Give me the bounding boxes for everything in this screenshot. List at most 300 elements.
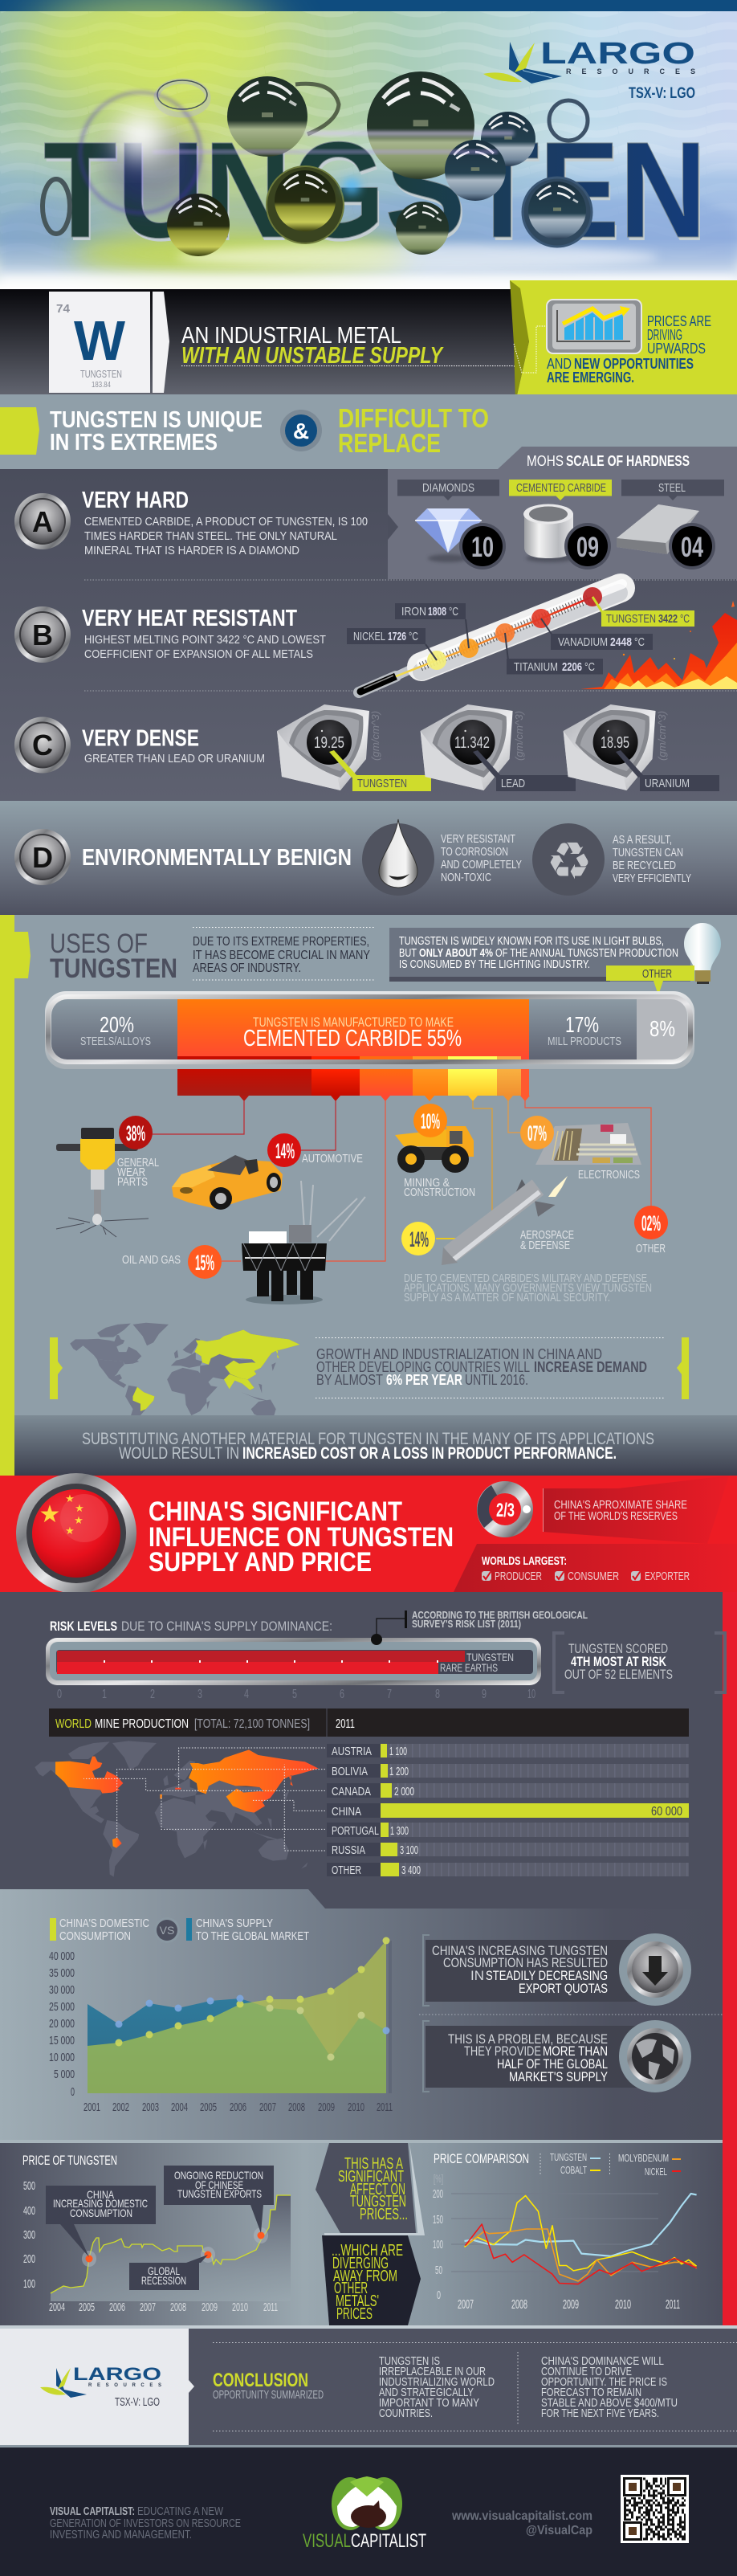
value: 14 percent — [267, 1133, 301, 1167]
icon: recycle — [532, 823, 605, 896]
line chart: price comparison: 150 — [433, 2213, 443, 2227]
text: corrosion resistance: NON-TOXIC — [441, 871, 491, 884]
title: China's influence — [149, 1496, 454, 1578]
line chart: price of tungsten: 2010 — [232, 2300, 248, 2314]
QR code — [621, 2475, 689, 2543]
text: corrosion resistance: TO CORROSION — [441, 845, 508, 859]
callout: export quotas: EXPORT QUOTAS — [519, 1981, 608, 1996]
text: demand growth: OTHER DEVELOPING COUNTRIES WILL — [316, 1359, 530, 1375]
risk level meter: 7 — [387, 1688, 392, 1701]
heading: uses of tungsten — [50, 929, 177, 984]
use: aerospace and defense — [401, 1176, 574, 1265]
line chart: price of tungsten: 2006 — [109, 2300, 125, 2314]
mohs score 04: 04 — [681, 532, 703, 563]
arrow: significant affect: AFFECT ON — [350, 2181, 405, 2198]
panel: Mohs scale of hardness: MOHS — [527, 453, 564, 469]
legend: TO THE GLOBAL MARKET — [196, 1929, 309, 1943]
density block: uranium: URANIUM — [645, 777, 690, 790]
line chart: price comparison: 200 — [433, 2187, 443, 2201]
text: uses intro: IT HAS BECOME CRUCIAL IN MANY — [193, 949, 370, 962]
arrow: diverging metals: PRICES — [336, 2305, 373, 2323]
callout: global supply — [423, 2020, 691, 2092]
segment: steels and alloys: STEELS/ALLOYS — [80, 1035, 151, 1048]
arrow: significant affect — [316, 2143, 425, 2325]
text: uses intro — [193, 935, 370, 975]
callout: reduced exports: TUNGSTEN EXPORTS — [177, 2187, 262, 2200]
segment: steels and alloys — [80, 1012, 151, 1048]
label: nickel: 1726 — [388, 630, 406, 643]
property B: very heat resistant: HIGHEST MELTING POINT 3422 °C AND LOWEST — [84, 633, 326, 647]
property A: very hard: A — [32, 505, 53, 538]
use: mining and construction: MINING & — [404, 1176, 450, 1190]
callout: export quotas: CHINA'S INCREASING TUNGSTEN — [432, 1943, 608, 1958]
text: demand growth: BY ALMOST — [316, 1372, 383, 1388]
area chart: consumption and supply — [49, 1937, 393, 2114]
icon: dump truck — [395, 1126, 474, 1173]
row: Portugal: PORTUGAL — [332, 1824, 379, 1838]
line chart: price comparison — [433, 2151, 697, 2312]
label: titanium: TITANIUM — [514, 660, 558, 674]
checklist: worlds largest: CONSUMER — [568, 1570, 619, 1583]
text: uses intro: DUE TO ITS EXTREME PROPERTIES, — [193, 935, 369, 949]
world mine production header: [TOTAL: 72,100 TONNES] — [194, 1717, 310, 1731]
text: national security: DUE TO CEMENTED CARBIDE'S MILITARY AND DEFENSE — [404, 1272, 647, 1285]
area chart: consumption and supply: 25 000 — [49, 2000, 75, 2014]
mohs score 10: 10 — [471, 532, 494, 563]
use: other: 02% — [641, 1211, 661, 1235]
panel: consumption vs supply — [0, 1889, 723, 2140]
row: Other: 3 400 — [401, 1864, 421, 1877]
legend: MOLYBDENUM — [618, 2152, 669, 2164]
legend: TUNGSTEN — [550, 2151, 587, 2163]
price callout panel — [510, 280, 737, 402]
heading: uses of tungsten: TUNGSTEN — [50, 953, 177, 984]
element card — [49, 292, 169, 393]
segment: cemented carbide: TUNGSTEN IS MANUFACTURED TO MAKE — [253, 1014, 454, 1030]
intro heading: AN INDUSTRIAL METAL — [181, 323, 401, 349]
area chart: consumption and supply: 15 000 — [49, 2034, 75, 2047]
mohs score 09: 09 — [576, 532, 599, 563]
row: Austria: 1 100 — [389, 1745, 407, 1758]
panel: Mohs scale of hardness — [388, 447, 737, 579]
text: demand growth: INCREASE DEMAND — [534, 1359, 647, 1375]
area chart: consumption and supply: 2002 — [112, 2100, 129, 2114]
density block: tungsten: (gm/cm^3) — [369, 711, 381, 761]
risk level meter: DUE TO CHINA'S SUPPLY DOMINANCE: — [121, 1619, 332, 1634]
area chart: consumption and supply: 10 000 — [49, 2051, 75, 2064]
heading: unique: TUNGSTEN IS UNIQUE — [50, 407, 263, 433]
carbide breakdown strip — [177, 1069, 530, 1101]
use: automotive — [172, 1133, 363, 1210]
legend: VS — [160, 1924, 174, 1937]
Visual Capitalist logo — [303, 2476, 426, 2552]
property A: very hard — [14, 488, 368, 557]
stacked bar: use share — [45, 991, 694, 1069]
price callout panel: UPWARDS — [647, 341, 706, 357]
label: titanium: 2206 — [562, 660, 582, 674]
row: Austria — [327, 1744, 689, 1758]
use: electronics: ELECTRONICS — [578, 1168, 640, 1182]
conclusion section — [0, 2329, 737, 2445]
callout: export quotas: CONSUMPTION HAS RESULTED — [443, 1955, 608, 1970]
risk level meter: RARE EARTHS — [440, 1661, 498, 1674]
Largo logo top right — [483, 37, 695, 102]
Largo logo small: TSX-V: LGO — [115, 2395, 160, 2409]
callout: light bulbs: OF THE ANNUAL TUNGSTEN PRODUCTION — [495, 946, 678, 960]
text: corrosion resistance: VERY RESISTANT — [441, 832, 515, 846]
text: recycled: BE RECYCLED — [613, 859, 676, 872]
heading band: unique and difficult to replace — [0, 394, 737, 469]
line chart: price comparison: PRICE COMPARISON — [434, 2151, 529, 2166]
callout: reduced exports: OF CHINESE — [195, 2178, 243, 2191]
arrow: diverging metals — [322, 2235, 421, 2325]
area chart: consumption and supply: 40 000 — [49, 1949, 75, 1963]
intro heading: WITH AN UNSTABLE SUPPLY — [181, 343, 444, 369]
Visual Capitalist logo: CAPITALIST — [351, 2530, 426, 2552]
legend: NICKEL — [645, 2166, 667, 2178]
icon: China flag button — [16, 1473, 136, 1594]
property D: environmentally benign: ENVIRONMENTALLY BENIGN — [82, 845, 352, 871]
density block: uranium: (gm/cm^3) — [656, 711, 668, 761]
density block: tungsten: 19.25 — [314, 734, 344, 752]
row: Bolivia — [327, 1764, 689, 1778]
callout: recession — [129, 2255, 208, 2290]
panel: China heading — [0, 1473, 737, 1594]
icon: cemented carbide cylinder — [523, 504, 574, 562]
text: Visual Capitalist about: GENERATION OF INVESTORS ON RESOURCE — [50, 2517, 241, 2530]
area chart: consumption and supply: 2001 — [83, 2100, 100, 2114]
text: conclusion column two: FOR THE NEXT FIVE YEARS. — [541, 2407, 659, 2420]
risk level meter: 10 — [527, 1688, 535, 1701]
properties section — [0, 447, 737, 801]
Largo logo small — [40, 2364, 161, 2409]
area chart: consumption and supply: 2011 — [377, 2100, 393, 2114]
text: national security: APPLICATIONS, MANY GOVERNMENTS VIEW TUNGSTEN — [404, 1281, 652, 1295]
callout: domestic consumption: CHINA — [87, 2188, 115, 2201]
label: iron: °C — [449, 605, 458, 618]
text: recycled: AS A RESULT, — [613, 833, 672, 847]
line chart: price of tungsten: 500 — [23, 2179, 35, 2193]
callout: 4th most at risk: 4TH MOST AT RISK — [571, 1654, 667, 1669]
area chart: consumption and supply: 2009 — [318, 2100, 335, 2114]
area chart: consumption and supply: 2004 — [171, 2100, 188, 2114]
callout: export quotas — [423, 1933, 691, 2006]
title: China's influence: INFLUENCE ON TUNGSTEN — [149, 1522, 454, 1553]
text: recycled: TUNGSTEN CAN — [613, 846, 683, 859]
segment: mill products: 17% — [565, 1012, 599, 1037]
icon: China flag button: ★ — [39, 1500, 60, 1529]
value: 07 percent: 07% — [527, 1121, 547, 1145]
segment: mill products: MILL PRODUCTS — [548, 1035, 621, 1048]
callout: light bulbs: ONLY ABOUT 4% — [419, 946, 493, 960]
row: Other: OTHER — [332, 1864, 361, 1877]
property B: very heat resistant — [14, 606, 326, 663]
world mine production header — [49, 1708, 689, 1737]
property B: very heat resistant: VERY HEAT RESISTANT — [82, 606, 297, 631]
heading: conclusion: CONCLUSION — [213, 2370, 308, 2391]
legend: CONSUMPTION — [59, 1929, 131, 1943]
icon: rising price chart — [547, 300, 641, 353]
row: China: CHINA — [332, 1805, 361, 1819]
label: titanium: °C — [584, 660, 595, 674]
use: general wear parts: WEAR — [117, 1166, 145, 1179]
icon: thermometer — [347, 584, 694, 692]
callout: reduced exports: ONGOING REDUCTION — [174, 2169, 263, 2182]
callout: light bulbs — [389, 928, 690, 982]
value: 10 percent: 10% — [421, 1109, 440, 1133]
text: demand growth — [316, 1346, 647, 1388]
segment: cemented carbide — [243, 1014, 462, 1051]
tag: diamonds: DIAMONDS — [422, 481, 474, 495]
risk level meter: 1 — [102, 1688, 107, 1701]
mohs score 04 — [669, 523, 715, 569]
property A: very hard: MINERAL THAT IS HARDER IS A DIAMOND — [84, 544, 299, 557]
risk level meter: 8 — [435, 1688, 440, 1701]
density block: lead — [421, 704, 576, 791]
title: China's influence: SUPPLY AND PRICE — [149, 1547, 372, 1578]
row: Austria: AUSTRIA — [332, 1745, 372, 1758]
text: Visual Capitalist about: EDUCATING A NEW — [137, 2505, 224, 2518]
callout: 4th most at risk: OUT OF 52 ELEMENTS — [564, 1667, 673, 1682]
text: conclusion column two — [541, 2354, 678, 2420]
callout: global supply: HALF OF THE GLOBAL — [497, 2056, 608, 2072]
use: general wear parts — [56, 1116, 159, 1237]
use: mining and construction — [395, 1104, 475, 1199]
label: nickel: NICKEL — [353, 630, 385, 643]
line chart: price of tungsten — [22, 2153, 291, 2314]
substitution note: INCREASED COST OR A LOSS IN PRODUCT PERFORMANCE. — [242, 1444, 617, 1463]
title: China's influence: CHINA'S SIGNIFICANT — [149, 1496, 402, 1527]
icon: China flag button: ★ — [75, 1503, 84, 1515]
line chart: price of tungsten: 2005 — [79, 2300, 95, 2314]
density block: lead: (gm/cm^3) — [513, 711, 525, 761]
chrome spheres and rings — [43, 71, 592, 256]
website and handle: www.visualcapitalist.com — [451, 2509, 592, 2523]
use: other: OTHER — [636, 1242, 666, 1255]
risk level meter: 4 — [244, 1688, 249, 1701]
intro band — [0, 280, 737, 402]
line chart: price comparison: 2009 — [563, 2298, 579, 2312]
substitution note: WOULD RESULT IN — [119, 1444, 239, 1463]
element card: 183.84 — [92, 381, 111, 390]
footer — [0, 2445, 737, 2576]
text: national security: SUPPLY AS A MATTER OF NATIONAL SECURITY. — [404, 1291, 610, 1304]
line chart: price of tungsten: 2011 — [263, 2300, 278, 2314]
price callout panel: NEW OPPORTUNITIES — [574, 356, 694, 372]
segment: other: 8% — [649, 1016, 675, 1041]
label: tungsten melting point: °C — [680, 612, 690, 626]
callout: export quotas: IN — [470, 1968, 484, 1983]
label: titanium — [507, 659, 603, 675]
row: Russia: RUSSIA — [332, 1843, 365, 1857]
label: tungsten melting point — [601, 610, 694, 627]
line chart: price of tungsten: PRICE OF TUNGSTEN — [22, 2153, 117, 2168]
panel: price charts — [0, 2140, 737, 2329]
area chart: consumption and supply: 2010 — [348, 2100, 364, 2114]
use: general wear parts: PARTS — [117, 1175, 148, 1189]
use: oil and gas — [122, 1181, 365, 1304]
label: iron: IRON — [401, 605, 426, 618]
text: Visual Capitalist about — [50, 2505, 241, 2541]
property B: very heat resistant: COEFFICIENT OF EXPANSION OF ALL METALS — [84, 647, 313, 661]
line chart: price of tungsten: 400 — [23, 2204, 35, 2218]
icon: light bulb — [684, 923, 721, 984]
area chart: consumption and supply: 2005 — [200, 2100, 217, 2114]
text: conclusion column one: IRREPLACEABLE IN OUR — [379, 2365, 486, 2378]
value: 14 percent yellow — [401, 1222, 435, 1255]
text: conclusion column two: CHINA'S DOMINANCE WILL — [541, 2354, 664, 2368]
legend: COBALT — [560, 2164, 587, 2176]
price callout panel: AND — [547, 356, 572, 372]
line chart: price comparison: 2007 — [458, 2298, 474, 2312]
arrow: diverging metals: OTHER — [334, 2280, 368, 2297]
text: conclusion column one: IMPORTANT TO MANY — [379, 2396, 479, 2410]
segment: steels and alloys: 20% — [100, 1012, 134, 1037]
line chart: price comparison: 2010 — [615, 2298, 631, 2312]
icon: China flag button: ★ — [65, 1525, 75, 1537]
row: Bolivia: BOLIVIA — [332, 1765, 368, 1778]
intro heading — [181, 323, 444, 369]
property D: environmentally benign — [0, 801, 737, 915]
line chart: price of tungsten: 200 — [23, 2252, 35, 2266]
area chart: consumption and supply: 2003 — [142, 2100, 159, 2114]
callout: global supply: THEY PROVIDE — [464, 2043, 541, 2059]
world mine production header: WORLD — [55, 1717, 92, 1731]
icon: jackhammer — [56, 1128, 149, 1237]
icon: water drop — [362, 819, 434, 896]
line chart: price of tungsten: 2004 — [49, 2300, 65, 2314]
text: recycled: VERY EFFICIENTLY — [613, 872, 691, 885]
area chart: consumption and supply: 2008 — [288, 2100, 305, 2114]
use: aerospace and defense: & DEFENSE — [520, 1239, 570, 1252]
icon: convertible car — [172, 1155, 283, 1210]
label: tungsten melting point: 3422 — [658, 612, 678, 626]
Largo logo top right: RESOURCES — [566, 67, 695, 76]
line chart: price of tungsten: 2008 — [170, 2300, 186, 2314]
callout: domestic consumption: INCREASING DOMESTIC — [53, 2197, 148, 2210]
tag: cemented carbide: CEMENTED CARBIDE — [516, 481, 606, 495]
text: conclusion column two: STABLE AND ABOVE $400/MTU — [541, 2396, 678, 2410]
icon: recycle: ♻ — [546, 832, 592, 892]
use: mining and construction: CONSTRUCTION — [404, 1186, 475, 1199]
label: nickel: °C — [409, 630, 418, 643]
density block: uranium: 18.95 — [601, 734, 629, 752]
Visual Capitalist logo: VISUAL — [303, 2530, 351, 2552]
risk level meter: 3 — [197, 1688, 202, 1701]
callout: global supply: MORE THAN — [543, 2043, 608, 2059]
use: electronics — [520, 1116, 641, 1182]
label: vanadium: 2448 — [610, 635, 632, 649]
row: Portugal — [327, 1823, 689, 1838]
label: iron: 1808 — [428, 605, 446, 618]
area chart: consumption and supply: 30 000 — [49, 1983, 75, 1997]
label: nickel — [347, 628, 426, 644]
segment: cemented carbide: CEMENTED CARBIDE 55% — [243, 1026, 462, 1051]
panel: uses of tungsten — [0, 915, 737, 1476]
row: Bolivia: 1 200 — [389, 1765, 409, 1778]
panel: Mohs scale of hardness: SCALE OF HARDNESS — [566, 453, 690, 469]
panel: China analysis — [0, 1592, 737, 2329]
risk level meter: 9 — [482, 1688, 487, 1701]
property D: environmentally benign: D — [32, 841, 53, 874]
callout: light bulbs: BUT — [399, 946, 417, 960]
label: vanadium — [551, 634, 653, 650]
callout: export quotas: STEADILY DECREASING — [486, 1968, 608, 1983]
icon: oil platform — [242, 1181, 365, 1304]
top band — [0, 0, 737, 11]
heading: unique: IN ITS EXTREMES — [50, 430, 218, 455]
arrow: significant affect: THIS HAS A — [344, 2155, 403, 2173]
line chart: price of tungsten: 300 — [23, 2228, 35, 2242]
row: Canada — [327, 1783, 689, 1798]
Largo logo small: LARGO — [73, 2364, 161, 2384]
connector lines — [151, 1100, 651, 1261]
tag: cemented carbide — [509, 480, 612, 500]
area chart: consumption and supply: 2006 — [230, 2100, 246, 2114]
checklist: worlds largest: EXPORTER — [645, 1570, 690, 1583]
text: demand growth: UNTIL 2016. — [465, 1372, 528, 1388]
callout: domestic consumption — [46, 2186, 156, 2257]
text: conclusion column one: AND STRATEGICALLY — [379, 2386, 474, 2399]
text: conclusion column two: OPPORTUNITY. THE PRICE IS — [541, 2375, 667, 2389]
area chart: consumption and supply: 5 000 — [54, 2068, 75, 2081]
tag: diamonds — [397, 480, 499, 500]
property C: very dense: GREATER THAN LEAD OR URANIUM — [84, 752, 265, 765]
text: conclusion column two: FORECAST TO REMAIN — [541, 2386, 641, 2399]
callout: light bulbs: IS CONSUMED BY THE LIGHTING INDUSTRY. — [399, 957, 590, 971]
density block: lead: 11.342 — [454, 734, 490, 752]
risk level meter: SURVEY'S RISK LIST (2011) — [412, 1618, 521, 1630]
heading: difficult — [338, 403, 489, 458]
icon: diamond — [415, 508, 482, 562]
heading: difficult: DIFFICULT TO — [338, 403, 489, 433]
property A: very hard: VERY HARD — [82, 488, 189, 513]
arrow: diverging metals: METALS' — [336, 2292, 379, 2310]
text: reserve share: CHINA'S APROXIMATE SHARE — [554, 1498, 687, 1512]
checklist: worlds largest: PRODUCER — [495, 1570, 542, 1583]
area chart: consumption and supply: 35 000 — [49, 1966, 75, 1980]
text: Visual Capitalist about: INVESTING AND MANAGEMENT. — [50, 2528, 192, 2541]
label: vanadium: °C — [634, 635, 645, 649]
risk level meter: ACCORDING TO THE BRITISH GEOLOGICAL — [412, 1609, 588, 1621]
area chart: consumption and supply: 20 000 — [49, 2017, 75, 2031]
price callout panel: DRIVING — [647, 327, 682, 343]
density block: uranium — [564, 704, 719, 791]
donut: two thirds share: 2/3 — [496, 1500, 515, 1521]
world map: mine production — [35, 1741, 325, 1877]
row: Russia — [327, 1843, 689, 1857]
label: tungsten melting point: TUNGSTEN — [606, 612, 656, 626]
label: iron — [395, 603, 466, 619]
label: vanadium: VANADIUM — [558, 635, 608, 649]
substitution note — [14, 1415, 737, 1476]
area chart: consumption and supply: 2007 — [259, 2100, 276, 2114]
legend: CHINA'S SUPPLY — [196, 1917, 273, 1930]
heading: conclusion: OPPORTUNITY SUMMARIZED — [213, 2388, 324, 2402]
tag: steel: STEEL — [658, 481, 686, 495]
mohs score 09 — [564, 523, 611, 569]
text: conclusion column two: CONTINUE TO DRIVE — [541, 2365, 632, 2378]
icon: China flag button: ★ — [65, 1493, 75, 1505]
legend — [50, 1917, 309, 1943]
line chart: price comparison: [%] — [434, 2172, 443, 2185]
icon: missile — [442, 1176, 568, 1265]
risk level meter: RISK LEVELS — [50, 1619, 117, 1634]
density block: lead: LEAD — [501, 777, 525, 790]
hero background — [0, 0, 737, 289]
row: China — [327, 1803, 689, 1819]
property C: very dense — [14, 716, 265, 773]
